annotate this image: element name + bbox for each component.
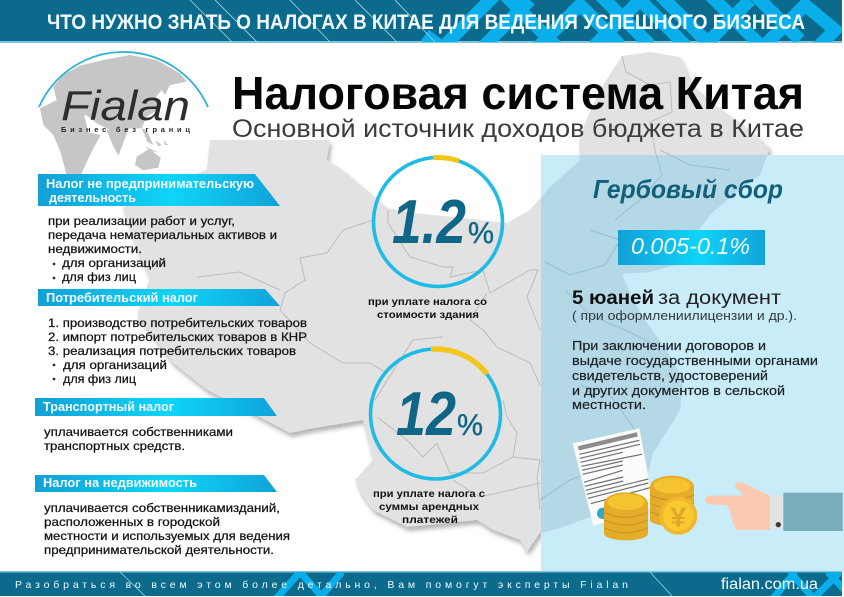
body text: для физ лиц <box>63 372 136 386</box>
stamp duty fee: за документ <box>658 288 781 309</box>
caption: при уплате налога со <box>368 296 487 308</box>
panel: tax on entrepreneurial activity <box>38 174 280 284</box>
stamp duty description: выдаче государственными органами <box>572 354 818 368</box>
caption <box>368 296 487 321</box>
top banner <box>0 0 842 43</box>
body text <box>48 316 307 386</box>
ribbon heading <box>35 475 277 492</box>
stamp duty description <box>572 339 818 412</box>
stamp duty description: При заключении договоров и <box>572 339 766 353</box>
footer call to action: Разобраться во всем этом более детально, Вам помогут эксперты Fialan <box>15 579 628 591</box>
body text: уплачивается собственниками <box>44 425 233 439</box>
ribbon heading: деятельность <box>49 191 136 205</box>
donut stat: 1.2% <box>368 158 502 321</box>
body text <box>44 425 233 453</box>
caption: платежей <box>402 514 458 526</box>
body text: транспортных средств. <box>44 439 185 453</box>
stamp duty description: свидетельств, удостоверений <box>572 369 768 383</box>
footer bar <box>0 571 844 597</box>
body text: уплачивается собственникамизданий, <box>44 501 280 515</box>
logo wordmark: Fialan <box>61 82 190 129</box>
panel: consumption tax <box>38 289 307 386</box>
stamp duty fee: 5 юаней <box>572 288 654 309</box>
panel: property tax <box>35 475 290 557</box>
body text: для организаций <box>63 358 167 372</box>
body text <box>48 214 277 284</box>
ribbon heading: Потребительский налог <box>46 291 198 305</box>
ribbon heading: Налог на недвижимость <box>43 476 197 490</box>
percent sign: % <box>468 217 494 250</box>
body text: передача нематериальных активов и <box>48 228 277 242</box>
logo: Fialan <box>39 52 208 176</box>
stamp duty fee: ( при оформлениилицензии и др.). <box>572 309 797 323</box>
ribbon heading <box>38 174 280 206</box>
title: Налоговая система Китая <box>232 67 804 119</box>
rate badge: 0.005-0.1% <box>631 233 750 259</box>
rate badge <box>618 230 765 265</box>
donut stat: 12% <box>370 349 500 526</box>
background map of China <box>123 52 772 556</box>
body text: недвижимости. <box>48 242 142 256</box>
footer website: fialan.com.ua <box>721 576 818 593</box>
icon: yen coin: ¥ <box>671 501 687 532</box>
body text: расположенных в городской <box>44 515 220 529</box>
body text: предпринимательской деятельности. <box>44 543 274 557</box>
body text: для физ лиц <box>62 270 136 284</box>
caption: при уплате налога с <box>373 488 485 500</box>
logo tagline: Бизнес без границ <box>61 125 190 134</box>
value: 1.2 <box>392 188 466 257</box>
caption: стоимости здания <box>377 309 479 321</box>
stamp duty description: местности. <box>572 398 646 412</box>
ribbon heading <box>35 398 277 416</box>
value: 12 <box>396 380 456 449</box>
panel: transport tax <box>35 398 277 453</box>
stamp duty fee <box>572 288 797 323</box>
icon: pointing hand <box>705 482 843 531</box>
ribbon heading: Налог не предпринимательскую <box>46 177 254 191</box>
caption: суммы арендных <box>379 501 479 513</box>
body text: для организаций <box>62 256 166 270</box>
icon: yen coin <box>659 497 697 535</box>
panel: stamp duty background <box>541 155 844 572</box>
body text: 2. импорт потребительских товаров в КНР <box>48 330 307 344</box>
illustration: document, coins and hand <box>573 428 843 540</box>
panel heading: stamp duty: Гербовый сбор <box>593 174 783 204</box>
subtitle: Основной источник доходов бюджета в Китае <box>232 115 804 143</box>
icon: left coin stack <box>604 492 648 540</box>
icon: right coin stack <box>650 476 694 526</box>
body text: 1. производство потребительских товаров <box>48 316 307 330</box>
body text <box>44 501 290 557</box>
body text: местности и используемых для ведения <box>44 529 290 543</box>
caption <box>373 488 485 526</box>
percent sign: % <box>457 409 483 442</box>
ribbon heading: Транспортный налог <box>43 400 174 414</box>
body text: при реализации работ и услуг, <box>48 214 235 228</box>
stamp duty description: и других документов в сельской <box>572 384 785 398</box>
icon: document <box>573 428 654 526</box>
ribbon heading <box>38 289 280 306</box>
logo globe <box>40 55 187 176</box>
body text: 3. реализация потребительских товаров <box>48 344 296 358</box>
